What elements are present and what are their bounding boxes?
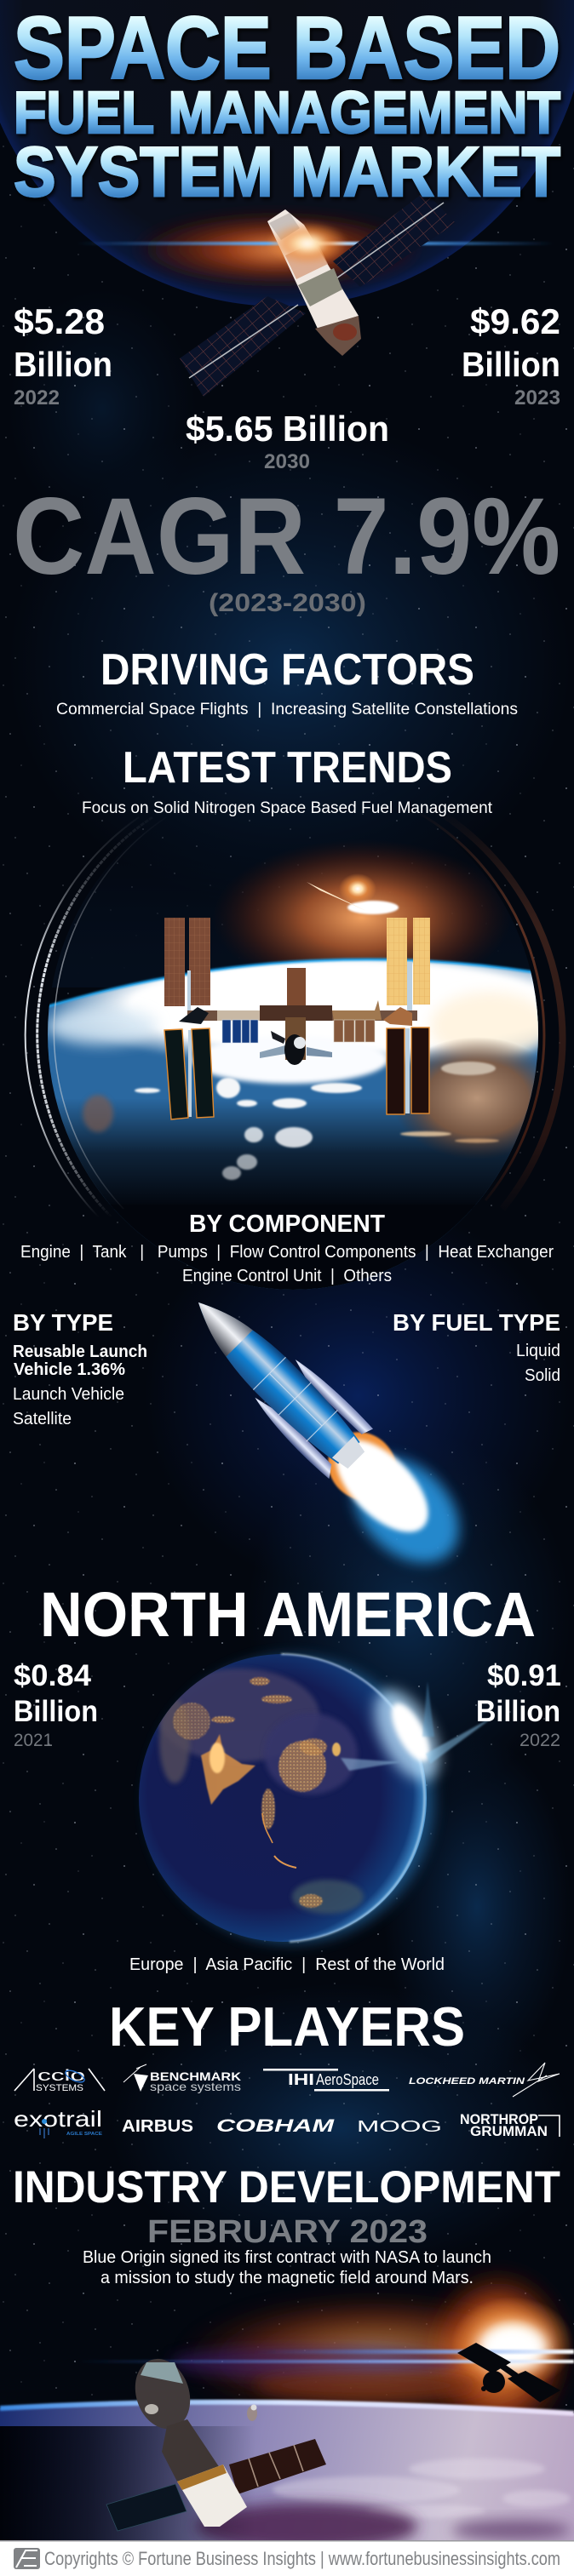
radiator: blue panels — [222, 1020, 258, 1043]
globe glow — [148, 1657, 434, 1943]
bottom scene: earth, capsule and satellite — [0, 2264, 574, 2550]
regional stat: 2022: $0.91 — [487, 1659, 561, 1692]
clouds — [135, 1062, 499, 1180]
sun glow — [428, 2266, 573, 2409]
hull bands — [253, 1357, 338, 1442]
footer — [0, 2540, 574, 2576]
truss — [179, 1000, 417, 1026]
dark left earth — [0, 2426, 255, 2540]
globe — [139, 1654, 496, 1943]
stat: 2022 value — [14, 301, 112, 409]
porthole rim: right — [419, 809, 562, 1209]
nose cone — [185, 1289, 253, 1357]
company logos — [14, 2063, 560, 2139]
solar array: lower right — [387, 1028, 429, 1114]
solar panel: upper right — [333, 192, 456, 287]
logo: Airbus: AIRBUS — [122, 2117, 193, 2136]
latest trends: Focus on Solid Nitrogen Space Based Fuel Management — [82, 799, 493, 817]
latest trends: LATEST TRENDS — [123, 743, 452, 793]
logo: Benchmark Space Systems — [123, 2064, 241, 2093]
regional stat: 2021 — [14, 1659, 98, 1750]
industry development: a mission to study the magnetic field around Mars. — [100, 2269, 474, 2287]
north america heading: NORTH AMERICA — [40, 1579, 536, 1650]
stat: 2023 value — [462, 301, 560, 409]
globe disc — [139, 1654, 427, 1942]
exhaust flame — [307, 1411, 479, 1583]
rocket illustration — [169, 1273, 479, 1583]
logo: Accion Systems: ccio — [37, 2067, 85, 2084]
logo: Accion Systems — [14, 2067, 105, 2093]
planet disc — [0, 0, 574, 306]
radiator: brown panels — [334, 1020, 375, 1042]
by type — [13, 1309, 147, 1428]
solar array: upper left — [164, 918, 210, 1006]
industry development: FEBRUARY 2023 — [147, 2214, 428, 2250]
other regions: Europe | Asia Pacific | Rest of the World — [129, 1955, 445, 1974]
logo: Accion Systems: SYSTEMS — [36, 2083, 83, 2093]
stat: 2022 value: $5.28 — [14, 301, 105, 341]
solar panel: left — [106, 2484, 187, 2531]
by type: Launch Vehicle — [13, 1385, 124, 1404]
driving factors — [56, 645, 518, 718]
regional stat: 2021: 2021 — [14, 1731, 53, 1750]
horizontal light streaks — [77, 2345, 574, 2397]
by type: Satellite — [13, 1410, 72, 1428]
solar panel: right — [229, 2439, 326, 2494]
CAGR headline: (2023-2030) — [209, 589, 366, 617]
driving factors: Commercial Space Flights | Increasing Satellite Constellations — [56, 701, 518, 718]
porthole scene — [48, 829, 538, 1290]
regional stat: 2021: $0.84 — [14, 1659, 92, 1692]
by fuel type: Solid — [525, 1366, 560, 1385]
by type: BY TYPE — [13, 1309, 113, 1336]
footer logo — [14, 2548, 40, 2569]
astronaut — [247, 2404, 257, 2421]
by component: BY COMPONENT — [189, 1211, 385, 1238]
by fuel type — [393, 1309, 560, 1385]
cloud texture — [273, 2459, 571, 2518]
by component: Engine | Tank | Pumps | Flow Control Components | Heat Exchanger — [20, 1243, 554, 1262]
right booster — [290, 1355, 374, 1439]
porthole rim: left — [26, 817, 166, 1217]
central modules — [260, 968, 332, 1065]
latest trends — [82, 743, 493, 817]
logo: Northrop Grumman — [460, 2111, 560, 2139]
stat: 2023 value: Billion — [462, 345, 560, 384]
continents and city lights — [158, 1669, 364, 1914]
logo: IHI AeroSpace: AeroSpace — [316, 2071, 379, 2088]
regional stat: 2021: Billion — [14, 1695, 98, 1728]
stat: 2030 value — [186, 409, 389, 473]
industry development: Blue Origin signed its first contract with NASA to launch — [83, 2248, 491, 2267]
satellite silhouette — [457, 2343, 560, 2402]
regional stat: 2022: Billion — [476, 1695, 560, 1728]
stat: 2022 value: Billion — [14, 345, 112, 384]
stat: 2030 value: 2030 — [264, 450, 310, 473]
lower purple shading — [196, 2503, 417, 2550]
driving factors: DRIVING FACTORS — [100, 645, 474, 695]
logo: Cobham: COBHAM — [216, 2116, 335, 2136]
logo: Lockheed Martin — [409, 2063, 560, 2097]
engine skirt — [332, 1436, 367, 1471]
left booster — [250, 1393, 337, 1480]
logo: IHI AeroSpace: IHI — [288, 2071, 314, 2088]
title — [14, 0, 560, 211]
logo: Exotrail: exotrail — [14, 2106, 102, 2132]
logo: Exotrail — [14, 2106, 103, 2138]
array masts — [187, 962, 412, 1117]
rocket body — [182, 1286, 365, 1469]
capsule — [135, 2358, 247, 2527]
logo: Benchmark Space Systems: BENCHMARK — [150, 2069, 241, 2083]
orange glow — [132, 212, 422, 287]
hero image: planet and space station — [0, 0, 574, 397]
logo: Lockheed Martin: LOCKHEED MARTIN — [409, 2076, 525, 2087]
by fuel type: Liquid — [516, 1342, 560, 1360]
by type: Vehicle 1.36% — [14, 1360, 125, 1379]
stat: 2023 value: $9.62 — [470, 301, 560, 341]
sun flare on rim — [341, 1680, 496, 1790]
logo: IHI AeroSpace — [263, 2069, 389, 2091]
earth surface — [0, 2402, 574, 2540]
stat: 2030 value: $5.65 Billion — [186, 409, 389, 449]
solar panel: lower left — [180, 296, 306, 397]
logo: Northrop Grumman: NORTHROP — [460, 2111, 538, 2127]
logo: Exotrail: AGILE SPACE — [66, 2132, 103, 2137]
by component: Engine Control Unit | Others — [182, 1267, 392, 1285]
solar array: lower left — [164, 1028, 214, 1119]
globe rim highlight — [281, 1654, 424, 1942]
sun burst — [307, 873, 399, 914]
horizon glow line — [43, 959, 545, 1008]
industry development — [13, 2162, 560, 2287]
logo: Northrop Grumman: GRUMMAN — [470, 2123, 548, 2139]
lens flare — [77, 242, 554, 245]
stat: 2022 value: 2022 — [14, 386, 60, 409]
earth limb — [0, 2402, 574, 2413]
by component — [20, 1211, 554, 1285]
by fuel type: BY FUEL TYPE — [393, 1309, 560, 1336]
station body — [267, 209, 361, 356]
regional stat: 2022: 2022 — [519, 1731, 560, 1750]
logo: Benchmark Space Systems: space systems — [150, 2080, 241, 2093]
regional stat: 2022 — [476, 1659, 561, 1750]
solar array: upper right — [387, 918, 430, 1005]
by type: Reusable Launch — [13, 1342, 147, 1361]
porthole view with earth and ISS — [26, 809, 574, 1290]
panel booms — [189, 203, 444, 378]
stat: 2023 value: 2023 — [514, 386, 560, 409]
sun flare — [267, 221, 348, 266]
space station — [164, 918, 430, 1119]
key players heading: KEY PLAYERS — [109, 1995, 465, 2058]
logo: Moog: MOOG — [357, 2118, 442, 2135]
